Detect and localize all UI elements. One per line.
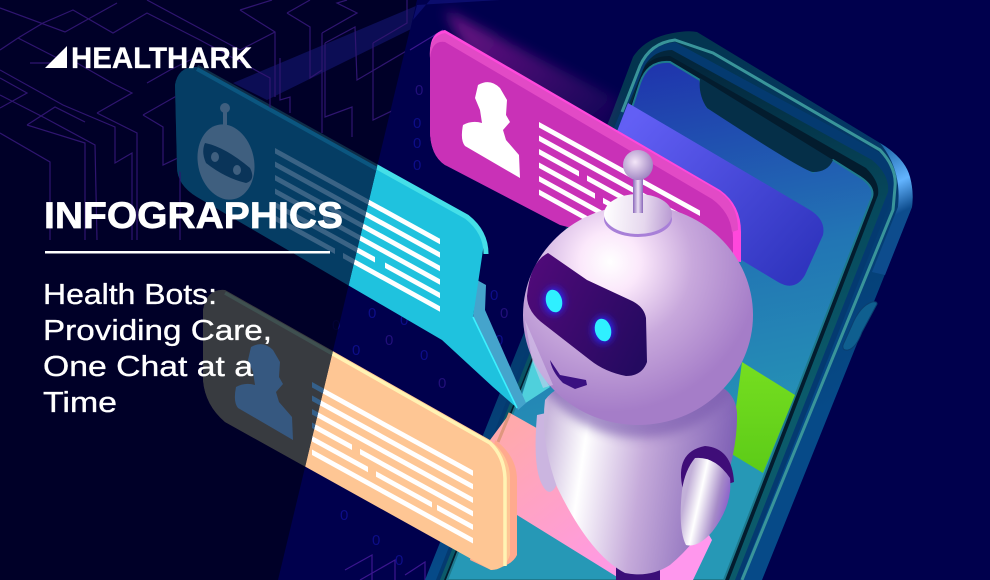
binary digit pattern: 0	[470, 347, 478, 364]
logo triangle mark	[45, 46, 67, 68]
phone teal bezel	[440, 50, 888, 580]
bot head	[191, 119, 261, 205]
robot left arm	[536, 410, 560, 492]
bubble side	[470, 440, 517, 570]
screen purple message block	[600, 103, 823, 286]
binary digit pattern: 0	[420, 347, 428, 364]
phone teal line	[622, 40, 895, 580]
glow behind magenta bubble	[445, 10, 620, 160]
antenna stick	[633, 178, 643, 213]
translucent tail reflection over robot head	[525, 320, 553, 388]
logo wordmark: HEALTHARK	[71, 42, 252, 75]
binary digit pattern: 0	[500, 305, 508, 322]
subtitle: Time	[43, 387, 117, 419]
binary digit pattern	[332, 82, 508, 569]
faint blue diagonal band	[233, 6, 416, 100]
speech tail side strip	[473, 280, 526, 410]
bot antenna	[220, 103, 230, 128]
circuit polylines	[0, 0, 417, 240]
robot body	[544, 380, 737, 574]
antenna collar	[604, 194, 672, 237]
screen pink block	[470, 413, 712, 580]
bubble top band	[430, 33, 738, 232]
subtitle	[43, 279, 272, 419]
binary digit pattern: 0	[413, 115, 421, 132]
binary digit pattern: 0	[495, 332, 503, 349]
binary digit pattern: 0	[415, 82, 423, 99]
circuit line pattern and band	[0, 0, 416, 240]
binary digit pattern: 0	[385, 332, 393, 349]
panel: cyan chat bubble	[175, 67, 526, 410]
phone screen	[447, 62, 872, 580]
binary digit pattern: 0	[395, 552, 403, 569]
light cyan reflection beside tail	[518, 360, 550, 408]
message text lines	[275, 148, 440, 312]
ghost bot icon in cyan bubble	[191, 103, 261, 205]
dimmed peach highlight	[224, 292, 333, 355]
binary digit pattern: 0	[332, 317, 340, 334]
icon: person silhouette	[462, 82, 520, 178]
bubble face	[430, 38, 733, 270]
binary digit pattern: 0	[400, 312, 408, 329]
bot eyes	[211, 152, 241, 175]
phone notch	[700, 78, 833, 172]
dimmed cyan highlight	[196, 67, 377, 170]
dimmed cyan face	[175, 67, 377, 286]
subtitle: Providing Care,	[43, 315, 272, 347]
phone inner blue band	[436, 42, 895, 580]
binary digit pattern: 0	[352, 342, 360, 359]
binary digit pattern: 0	[368, 305, 376, 322]
antenna ball	[623, 150, 653, 180]
circuit lines, lower right	[345, 30, 443, 580]
binary digit pattern: 0	[438, 375, 446, 392]
phone outer casing	[425, 31, 913, 580]
robot right arm band	[681, 446, 734, 490]
dimmed peach face	[203, 290, 333, 466]
binary digit pattern: 0	[413, 135, 421, 152]
subtitle: One Chat at a	[43, 351, 254, 383]
binary digit pattern: 0	[340, 507, 348, 524]
phone black bezel	[444, 56, 878, 580]
bubble face	[175, 67, 517, 408]
eye glow	[544, 288, 613, 343]
title: INFOGRAPHICS	[44, 195, 343, 236]
pink block tan border	[498, 413, 510, 442]
dimmed peach bubble	[203, 290, 333, 466]
bubble highlight	[225, 293, 505, 566]
dimmed person icon	[235, 344, 293, 440]
bot visor	[203, 143, 252, 183]
dimmed message lines	[275, 148, 369, 264]
robot visor	[527, 253, 647, 376]
tail bright line	[473, 317, 517, 408]
dimmed message lines	[312, 382, 324, 438]
panel: peach chat bubble	[203, 290, 517, 570]
robot neck	[616, 565, 660, 580]
dark diagonal overlay panel	[0, 0, 417, 580]
robot character	[523, 150, 756, 580]
dimmed cyan bubble	[175, 67, 377, 286]
robot mouth	[550, 360, 587, 389]
bubble base	[430, 30, 741, 262]
bubble face	[203, 290, 510, 570]
message text lines	[539, 122, 700, 284]
message text lines	[312, 382, 473, 544]
bubble highlight	[197, 67, 486, 254]
robot eyes	[543, 288, 614, 343]
logo	[45, 42, 252, 75]
panel: magenta chat bubble	[430, 30, 741, 284]
robot right arm	[681, 458, 730, 545]
binary digit pattern: 0	[372, 532, 380, 549]
phone side button	[843, 302, 877, 350]
binary digit pattern: 0	[413, 157, 421, 174]
title underline	[45, 251, 330, 254]
binary digit pattern: 0	[490, 287, 498, 304]
robot head	[523, 205, 753, 425]
phone blue rim highlight	[872, 143, 913, 275]
panel: smartphone	[425, 31, 913, 580]
subtitle: Health Bots:	[43, 279, 217, 311]
head shadow on body	[546, 388, 729, 444]
screen green block	[730, 362, 795, 473]
faint blue diagonal band, outer part	[413, 0, 500, 20]
